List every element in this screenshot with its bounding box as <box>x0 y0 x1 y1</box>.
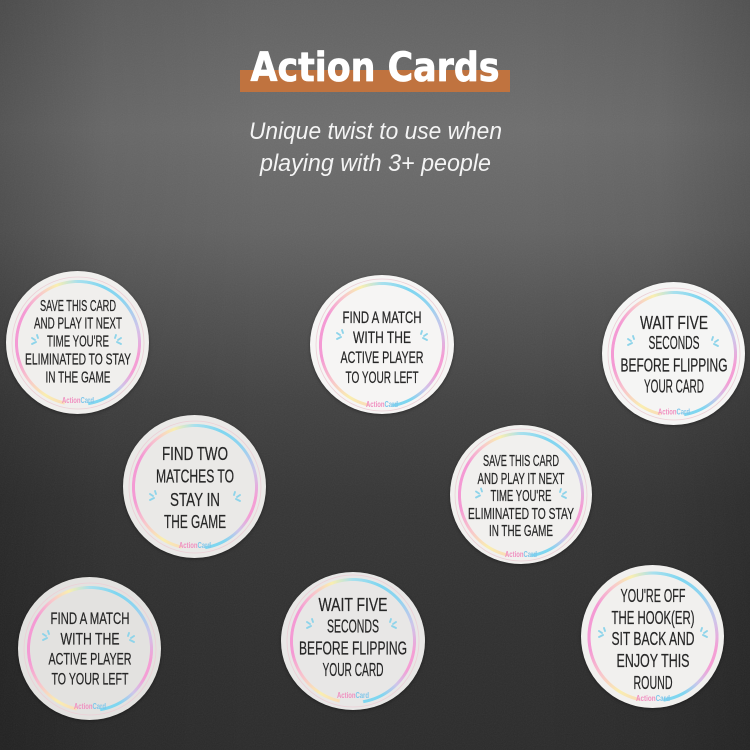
logo: ActionCard <box>505 548 537 558</box>
card 7: wait five seconds <box>281 572 425 710</box>
card text: TO YOUR LEFT <box>346 368 418 386</box>
card text: AND PLAY IT NEXT <box>478 470 565 488</box>
card 6: find a match <box>18 577 161 720</box>
sparkles <box>32 334 120 344</box>
card text: TO YOUR LEFT <box>51 670 128 688</box>
card 8: off the hook <box>581 565 724 708</box>
card text: ELIMINATED TO STAY <box>24 351 130 368</box>
card text: ROUND <box>633 672 672 692</box>
card text <box>468 452 574 540</box>
sparkles <box>42 630 134 642</box>
card text: ACTIVE PLAYER <box>340 348 424 366</box>
subtitle: Unique twist to use when <box>249 118 502 145</box>
title highlight bar <box>240 70 510 92</box>
sparkles <box>337 330 427 340</box>
card text: IN THE GAME <box>45 369 110 386</box>
card text: ENJOY THIS <box>616 650 689 670</box>
title: Action Cards <box>250 45 500 91</box>
card text: SAVE THIS CARD <box>483 452 559 470</box>
sparkles <box>476 488 566 498</box>
logo: ActionCard <box>366 398 398 408</box>
sparkles <box>598 628 706 636</box>
card 1: save this card <box>6 271 149 414</box>
card text <box>611 586 694 692</box>
card text: BEFORE FLIPPING <box>299 638 407 658</box>
card text: WITH THE <box>60 630 119 648</box>
sparkles <box>628 336 718 346</box>
card text: FIND A MATCH <box>50 610 129 628</box>
card 2: find a match <box>310 275 454 414</box>
card text: TIME YOU'RE <box>46 333 108 350</box>
sparkles <box>307 619 396 628</box>
card text: THE HOOK(ER) <box>611 608 694 628</box>
card text: ELIMINATED TO STAY <box>468 506 574 522</box>
header: title and subtitle <box>240 45 510 177</box>
subtitle: playing with 3+ people <box>259 150 491 177</box>
card text: STAY IN <box>170 490 220 510</box>
logo: ActionCard <box>178 540 210 550</box>
card text: AND PLAY IT NEXT <box>34 315 122 332</box>
card text: WAIT FIVE <box>640 312 708 332</box>
card text <box>156 444 234 532</box>
card text <box>299 595 407 680</box>
card text: TIME YOU'RE <box>491 488 551 504</box>
logo: ActionCard <box>636 692 670 702</box>
sparkles <box>150 490 240 500</box>
card text: MATCHES TO <box>156 466 234 486</box>
logo: ActionCard <box>62 394 94 404</box>
card text: THE GAME <box>164 512 226 532</box>
card 5: save this card <box>450 425 592 564</box>
card text: SECONDS <box>648 332 699 352</box>
card text: FIND A MATCH <box>342 308 422 326</box>
card 4: find two matches <box>123 415 266 558</box>
card text <box>340 308 424 386</box>
logo: ActionCard <box>658 406 690 416</box>
card text: YOU'RE OFF <box>620 586 685 606</box>
card text: YOUR CARD <box>644 376 704 396</box>
card text: FIND TWO <box>162 444 228 464</box>
card text: WITH THE <box>353 328 411 346</box>
card text: SECONDS <box>327 616 379 636</box>
card text <box>48 610 131 688</box>
card text: WAIT FIVE <box>318 595 388 615</box>
logo: ActionCard <box>74 700 106 710</box>
card text: IN THE GAME <box>489 522 553 540</box>
card text: SAVE THIS CARD <box>40 298 116 314</box>
card text: YOUR CARD <box>323 660 383 680</box>
logo: ActionCard <box>337 690 369 700</box>
card text <box>24 298 130 386</box>
card text: SIT BACK AND <box>611 628 694 648</box>
card text: ACTIVE PLAYER <box>48 650 131 668</box>
card 3: wait five seconds <box>602 282 745 425</box>
card text <box>620 312 727 396</box>
